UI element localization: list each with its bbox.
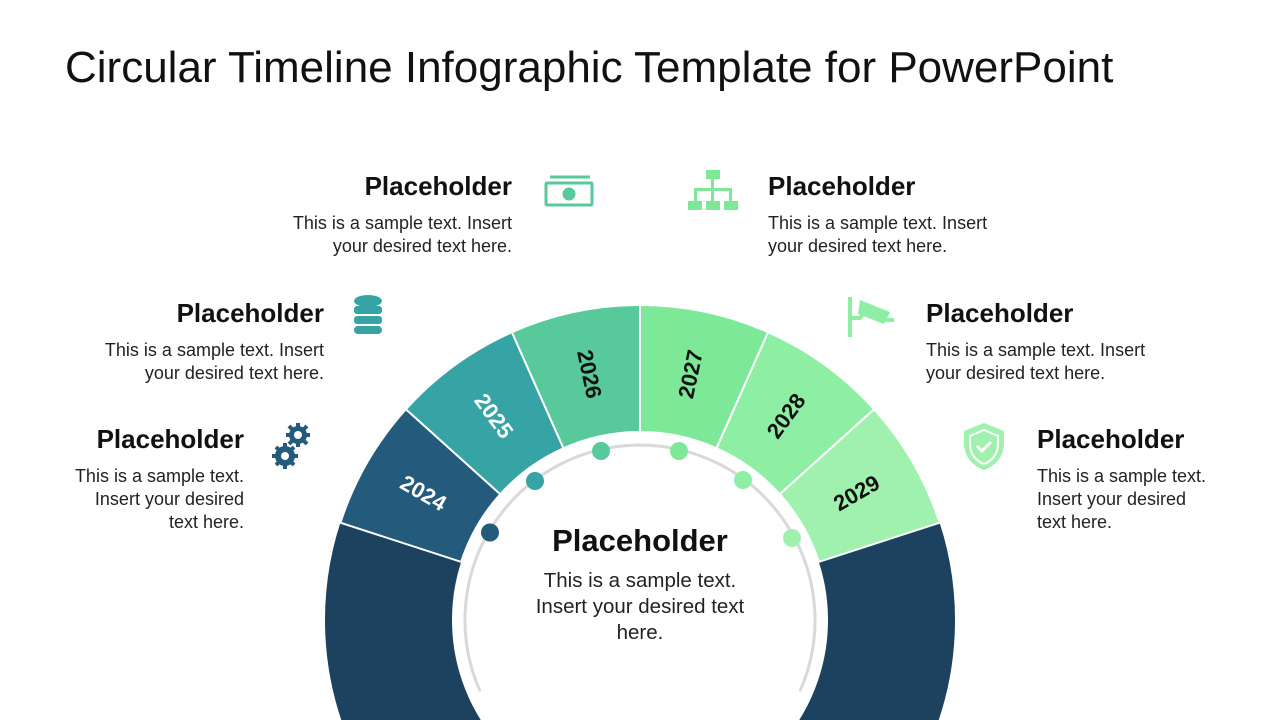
text block: middle left: Placeholder — [177, 298, 324, 328]
text block: top right: This is a sample text. Insert — [768, 213, 987, 233]
segment 2025 — [406, 332, 564, 494]
text block: lower right: Insert your desired — [1037, 489, 1186, 509]
segment 2025: 2025 — [469, 389, 518, 443]
segment 2028 — [716, 332, 874, 494]
text block: middle right: your desired text here. — [926, 363, 1105, 383]
center text block: This is a sample text. — [544, 569, 736, 592]
segment 2029 — [780, 409, 940, 562]
center text block — [536, 523, 744, 644]
text block: lower right: text here. — [1037, 512, 1112, 532]
icon: money — [546, 177, 592, 205]
center text block: here. — [617, 621, 663, 644]
text block: lower right: Placeholder — [1037, 424, 1184, 454]
icon: org chart — [688, 170, 738, 210]
text block: middle left: your desired text here. — [145, 363, 324, 383]
text block: middle right: This is a sample text. Insert — [926, 340, 1145, 360]
text block: lower left: Insert your desired — [95, 489, 244, 509]
center text block: Insert your desired text — [536, 595, 744, 618]
segment 2024 — [340, 409, 500, 562]
text block: lower left: This is a sample text. — [75, 466, 244, 486]
text block: lower left — [75, 424, 244, 532]
text block: top left: your desired text here. — [333, 236, 512, 256]
icon: camera — [848, 297, 894, 337]
text block: lower right: This is a sample text. — [1037, 466, 1206, 486]
icon: database — [354, 295, 382, 334]
icon: gears — [272, 423, 310, 469]
text block: lower right — [1037, 424, 1206, 532]
text block: top right — [768, 171, 987, 256]
segment 2027: 2027 — [673, 348, 708, 401]
segment 2024: 2024 — [396, 470, 452, 516]
timeline dots — [481, 442, 801, 547]
segment 2028: 2028 — [762, 389, 811, 443]
text block: top left: Placeholder — [365, 171, 512, 201]
center text block: Placeholder — [552, 523, 728, 558]
text block: top left: This is a sample text. Insert — [293, 213, 512, 233]
text block: middle left — [105, 298, 324, 383]
text block: top right: Placeholder — [768, 171, 915, 201]
text block: middle right — [926, 298, 1145, 383]
segment 2029: 2029 — [829, 470, 884, 516]
segment 2026 — [512, 305, 640, 448]
text block: lower left: Placeholder — [97, 424, 244, 454]
dark base ring — [388, 368, 892, 720]
grey inner arc — [465, 445, 815, 691]
icon: shield — [964, 423, 1004, 470]
segment 2027 — [640, 305, 768, 448]
text block: middle left: This is a sample text. Insert — [105, 340, 324, 360]
text block: middle right: Placeholder — [926, 298, 1073, 328]
text block: top left — [293, 171, 512, 256]
text block: top right: your desired text here. — [768, 236, 947, 256]
title: Circular Timeline Infographic Template for PowerPoint — [65, 43, 1113, 92]
text block: lower left: text here. — [169, 512, 244, 532]
segment 2026: 2026 — [572, 348, 607, 401]
